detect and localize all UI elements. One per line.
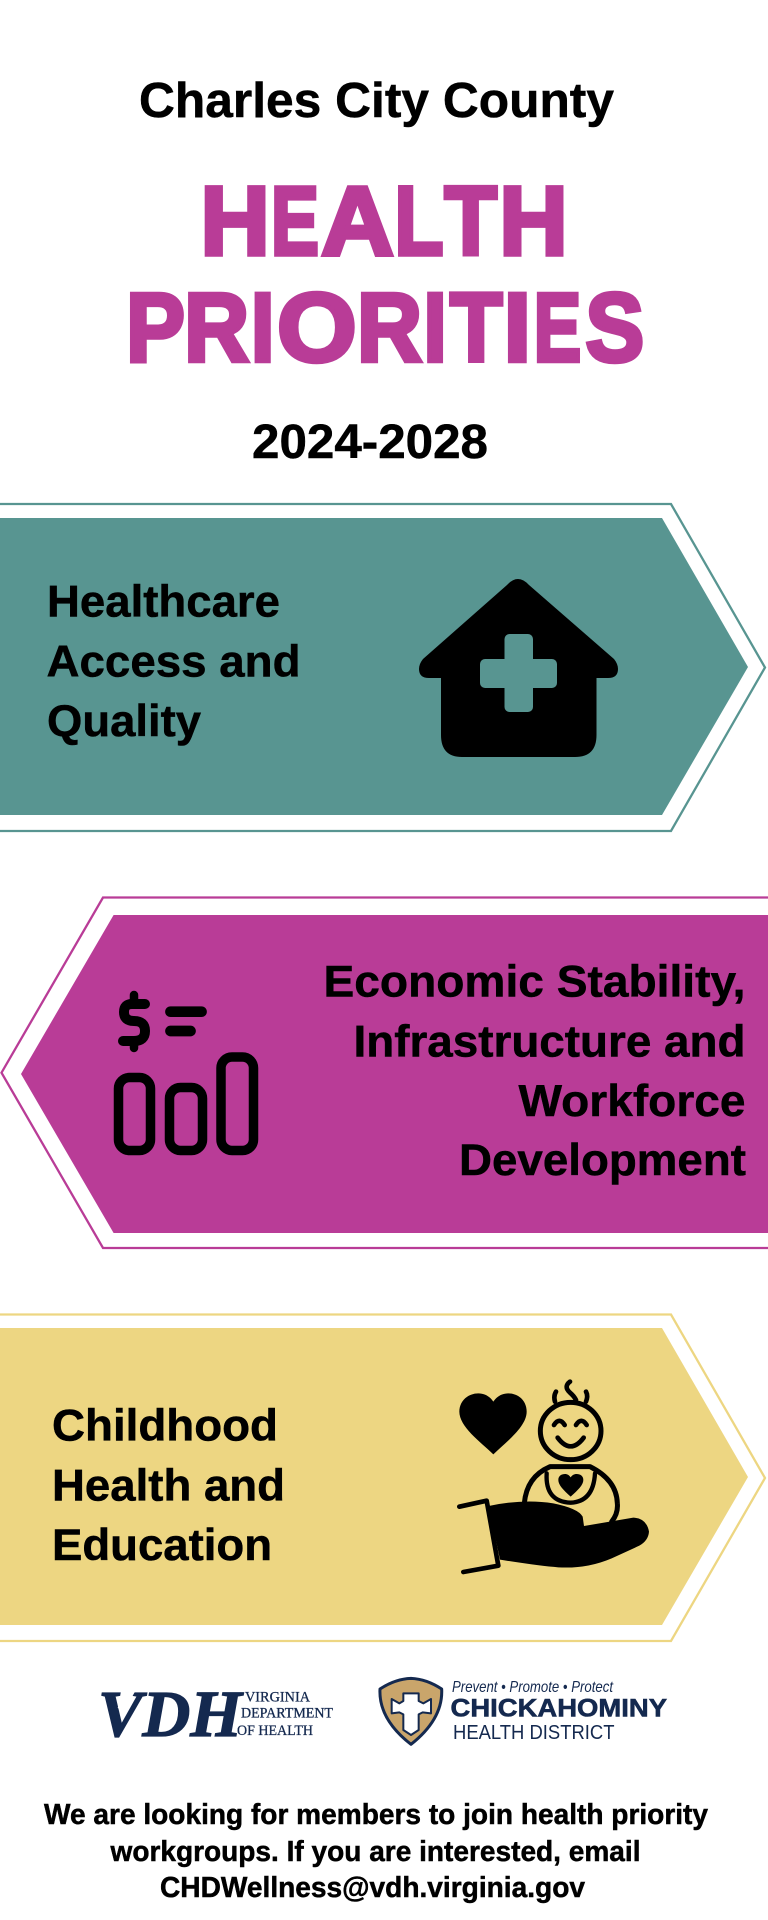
heading: county name: Charles City County (139, 73, 614, 128)
heading: years: 2024-2028 (252, 415, 488, 469)
icon: shield with cross (380, 1678, 442, 1744)
title: health priorities: T (444, 166, 497, 275)
title: health priorities: E (534, 273, 581, 382)
logo: Chickahominy Health District (380, 1678, 667, 1744)
title: health priorities: R (357, 273, 422, 382)
logo: Virginia Department of Health: VIRGINIA (245, 1690, 311, 1706)
text block: call to action: CHDWellness@vdh.virginia.gov (160, 1872, 585, 1904)
panel: childhood health and education: Education (52, 1521, 272, 1570)
icon: baby in hand with heart (459, 1382, 649, 1572)
title: health priorities: L (395, 166, 444, 275)
title: health priorities: S (585, 273, 644, 382)
title: health priorities: A (321, 166, 394, 275)
icon: dollar and bar chart (118, 995, 254, 1150)
icon: house with medical cross (419, 579, 618, 757)
title: health priorities: R (184, 273, 249, 382)
panel: economic stability: Development (459, 1136, 746, 1185)
panel: healthcare access and quality: Access and (46, 638, 300, 687)
text block: call to action: workgroups. If you are interested, email (110, 1836, 641, 1868)
title: health priorities: I (504, 273, 531, 382)
panel: economic stability (2, 898, 768, 1248)
logo: Chickahominy Health District: HEALTH DISTRICT (453, 1722, 614, 1744)
panel: childhood health and education: Childhood (52, 1402, 278, 1451)
panel: healthcare access and quality: Quality (47, 697, 201, 746)
panel: childhood health and education (0, 1314, 765, 1641)
title: health priorities: H (200, 166, 270, 275)
title: health priorities: I (423, 273, 447, 382)
title: health priorities (126, 166, 644, 382)
title: health priorities: I (251, 273, 274, 382)
text block: call to action: We are looking for members to join health priority (44, 1799, 708, 1831)
logo: Virginia Department of Health (98, 1678, 333, 1751)
title: health priorities: H (499, 166, 568, 275)
panel: healthcare access and quality: Healthcare (47, 578, 280, 627)
logo: Chickahominy Health District: Prevent • Promote • Protect (452, 1679, 613, 1696)
logo: Chickahominy Health District: CHICKAHOMINY (450, 1695, 667, 1723)
title: health priorities: E (271, 166, 319, 275)
logo: Virginia Department of Health: OF HEALTH (237, 1723, 313, 1739)
text block: call to action (44, 1799, 708, 1904)
panel: economic stability: Workforce (518, 1077, 746, 1126)
logo: Virginia Department of Health: VDH (98, 1678, 245, 1751)
panel: economic stability: Economic Stability, (324, 958, 746, 1007)
panel: childhood health and education: Health and (52, 1462, 285, 1511)
panel: economic stability: Infrastructure and (354, 1018, 746, 1067)
logo: Virginia Department of Health: DEPARTMENT (241, 1706, 333, 1722)
title: health priorities: T (450, 273, 502, 382)
title: health priorities: O (277, 273, 357, 382)
panel: healthcare access and quality (0, 504, 765, 831)
title: health priorities: P (126, 273, 185, 382)
